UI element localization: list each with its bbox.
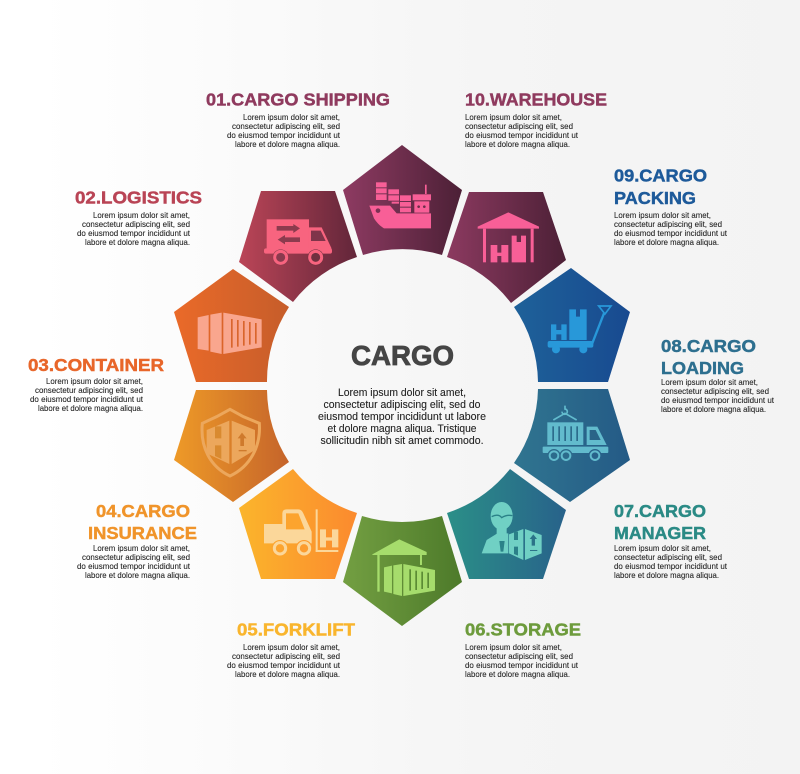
text 01: consectetur adipiscing elit, sed (232, 121, 340, 131)
label 08 (661, 336, 775, 414)
text 05 (227, 642, 341, 679)
text 07: do eiusmod tempor incididunt ut (614, 561, 728, 571)
text 05: labore et dolore magna aliqua. (235, 669, 340, 679)
text 01: Lorem ipsum dolor sit amet, (243, 112, 340, 122)
text 07: consectetur adipiscing elit, sed (614, 552, 722, 562)
center description: consectetur adipiscing elit, sed do (324, 399, 480, 411)
text 04: Lorem ipsum dolor sit amet, (93, 543, 190, 553)
icon: warehouse (478, 212, 539, 262)
text 09: consectetur adipiscing elit, sed (614, 219, 722, 229)
label 06 (465, 620, 581, 679)
heading 09: PACKING (614, 188, 696, 208)
text 10: Lorem ipsum dolor sit amet, (465, 112, 562, 122)
segment 02: logistics (239, 191, 357, 302)
text 03: labore et dolore magna aliqua. (38, 403, 143, 413)
text 06: Lorem ipsum dolor sit amet, (465, 642, 562, 652)
center description (318, 387, 486, 447)
icon: truck with crane-loaded container (543, 406, 608, 462)
text 01: labore et dolore magna aliqua. (235, 139, 340, 149)
text 05: Lorem ipsum dolor sit amet, (243, 642, 340, 652)
heading 04: 04.CARGO (96, 501, 190, 521)
label 02 (75, 188, 202, 247)
text 01: do eiusmod tempor incididunt ut (227, 130, 341, 140)
text 09: Lorem ipsum dolor sit amet, (614, 210, 711, 220)
heading 09 (614, 166, 707, 208)
heading 04: INSURANCE (88, 523, 197, 543)
text 08: labore et dolore magna aliqua. (661, 404, 766, 414)
icon: hand truck with boxes (548, 306, 611, 353)
pentagon 02 (239, 191, 357, 302)
segment 09: cargo packing (514, 268, 630, 382)
text 07 (614, 543, 728, 580)
center description: et dolore magna aliqua. Tristique (328, 423, 476, 435)
text 07: labore et dolore magna aliqua. (614, 570, 719, 580)
label 07 (614, 501, 728, 580)
text 03: consectetur adipiscing elit, sed (35, 385, 143, 395)
heading 01: 01.CARGO SHIPPING (206, 90, 390, 110)
label 05 (227, 620, 355, 679)
pentagon 06 (343, 516, 462, 626)
text 01 (227, 112, 341, 149)
pentagon 08 (514, 389, 630, 502)
text 10 (465, 112, 579, 149)
pentagon 03 (174, 269, 289, 382)
text 03 (30, 376, 144, 413)
icon: forklift (264, 509, 338, 557)
text 09: do eiusmod tempor incididunt ut (614, 228, 728, 238)
segment 05: forklift (239, 469, 357, 579)
text 09: labore et dolore magna aliqua. (614, 237, 719, 247)
segment 07: cargo manager (447, 469, 566, 579)
text 02 (77, 210, 191, 247)
text 10: do eiusmod tempor incididunt ut (465, 130, 579, 140)
heading 04 (88, 501, 197, 543)
text 08 (661, 377, 775, 414)
pentagon 04 (174, 390, 289, 502)
heading 08: LOADING (661, 358, 744, 378)
heading 09: 09.CARGO (614, 166, 707, 186)
text 05: consectetur adipiscing elit, sed (232, 651, 340, 661)
text 06: consectetur adipiscing elit, sed (465, 651, 573, 661)
icon: insurance shield (202, 409, 259, 476)
text 02: consectetur adipiscing elit, sed (82, 219, 190, 229)
center description: Lorem ipsum dolor sit amet, (338, 387, 466, 399)
text 02: do eiusmod tempor incididunt ut (77, 228, 191, 238)
pentagon 01 (343, 145, 462, 255)
text 05: do eiusmod tempor incididunt ut (227, 660, 341, 670)
text 06: labore et dolore magna aliqua. (465, 669, 570, 679)
segment 01: cargo shipping (343, 145, 462, 255)
icon: delivery truck (264, 219, 332, 265)
heading 08: 08.CARGO (661, 336, 756, 356)
pentagon 09 (514, 268, 630, 382)
label 09 (614, 166, 728, 247)
text 03: Lorem ipsum dolor sit amet, (46, 376, 143, 386)
heading 08 (661, 336, 756, 378)
text 06 (465, 642, 579, 679)
heading 07: MANAGER (614, 523, 706, 543)
label 10 (465, 90, 607, 149)
text 02: labore et dolore magna aliqua. (85, 237, 190, 247)
heading 07: 07.CARGO (614, 501, 706, 521)
pentagon 10 (447, 192, 566, 303)
segment 03: container (174, 269, 289, 382)
heading 03: 03.CONTAINER (28, 355, 164, 375)
icon: cargo manager with box (482, 502, 542, 560)
pentagon 07 (447, 469, 566, 579)
center description: sollicitudin nibh sit amet commodo. (320, 435, 484, 447)
text 10: consectetur adipiscing elit, sed (465, 121, 573, 131)
text 04: do eiusmod tempor incididunt ut (77, 561, 191, 571)
heading 06: 06.STORAGE (465, 620, 581, 640)
text 08: Lorem ipsum dolor sit amet, (661, 377, 758, 387)
text 04: consectetur adipiscing elit, sed (82, 552, 190, 562)
text 04: labore et dolore magna aliqua. (85, 570, 190, 580)
heading 02: 02.LOGISTICS (75, 188, 202, 208)
icon: shipping container (198, 313, 262, 354)
pentagon 05 (239, 469, 357, 579)
icon: storage shed and container (372, 539, 435, 596)
center description: eiusmod tempor incididunt ut labore (318, 411, 486, 423)
text 08: consectetur adipiscing elit, sed (661, 386, 769, 396)
text 03: do eiusmod tempor incididunt ut (30, 394, 144, 404)
text 09 (614, 210, 728, 247)
segment 04: cargo insurance (174, 390, 289, 502)
text 08: do eiusmod tempor incididunt ut (661, 395, 775, 405)
text 02: Lorem ipsum dolor sit amet, (93, 210, 190, 220)
text 10: labore et dolore magna aliqua. (465, 139, 570, 149)
label 01 (206, 90, 390, 149)
heading 10: 10.WAREHOUSE (465, 90, 607, 110)
text 04 (77, 543, 191, 580)
segment 08: cargo loading (514, 389, 630, 502)
title: cargo: CARGO (351, 340, 454, 371)
segment 10: warehouse (447, 192, 566, 303)
label 03 (28, 355, 164, 413)
icon: cargo ship (369, 182, 431, 228)
text 07: Lorem ipsum dolor sit amet, (614, 543, 711, 553)
heading 07 (614, 501, 706, 543)
text 06: do eiusmod tempor incididunt ut (465, 660, 579, 670)
label 04 (77, 501, 197, 580)
heading 05: 05.FORKLIFT (237, 620, 355, 640)
segment 06: storage (343, 516, 462, 626)
